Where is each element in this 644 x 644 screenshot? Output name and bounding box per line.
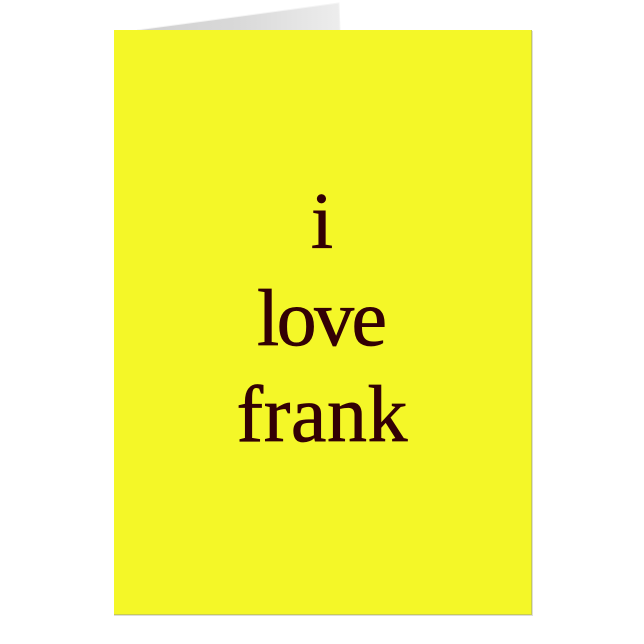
card message: i [311,178,333,266]
card message: frank [236,371,408,459]
card front panel [114,30,533,616]
card message: love [257,275,387,363]
back panel of the card [137,3,340,30]
card message [236,178,408,459]
